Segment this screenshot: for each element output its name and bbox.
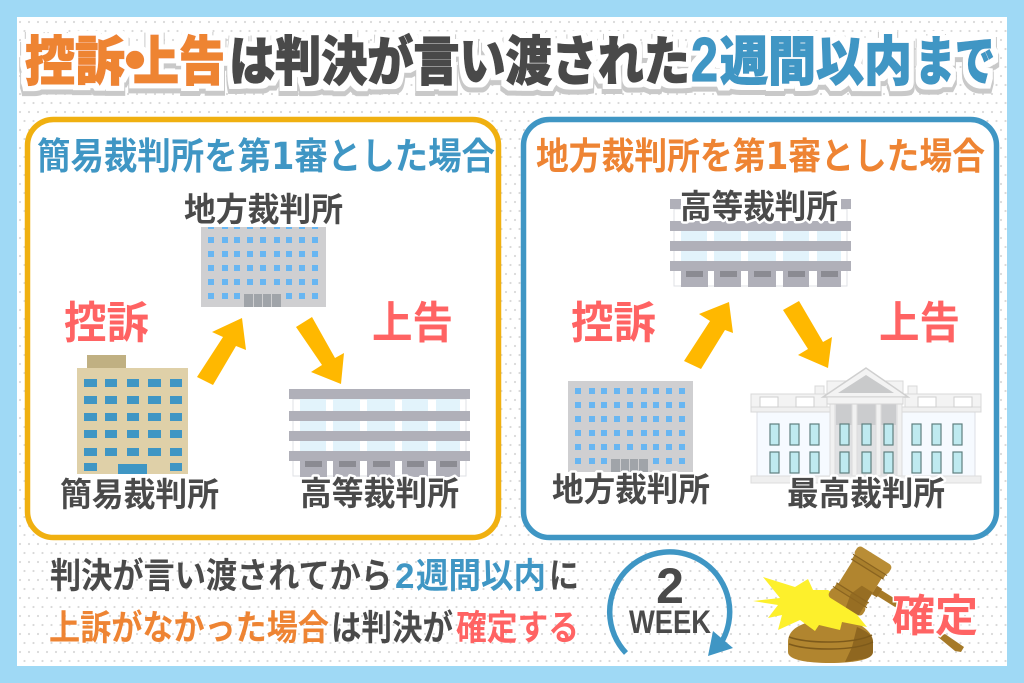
icon: gavel — [753, 545, 964, 663]
label: supreme court: 最高裁判所 — [787, 475, 945, 512]
text: bottom line one: 判決が言い渡されてから — [50, 557, 392, 596]
title: まで — [915, 33, 995, 92]
title: 控訴 — [25, 33, 125, 92]
icon: 2 week cycle: WEEK — [629, 604, 711, 640]
building: summary court — [77, 355, 188, 474]
building: high court — [670, 199, 851, 287]
panel: district court as first instance — [28, 120, 498, 538]
icon: 2 week cycle — [610, 552, 733, 656]
title: 週間以内 — [720, 33, 912, 92]
appeal label 上告: 上告 — [372, 299, 453, 348]
title: は判決が言い渡された — [229, 32, 690, 92]
title: 2 — [691, 26, 718, 95]
panel: high court as appellate — [524, 120, 996, 538]
appeal label 控訴: 控訴 — [571, 299, 656, 348]
text: bottom line two — [49, 609, 579, 648]
text: bottom line two: 上訴がなかった場合 — [49, 609, 329, 648]
text: bottom line one: 週間以内 — [416, 557, 546, 596]
text: bottom line one: に — [549, 557, 579, 596]
panel frame left — [28, 120, 498, 538]
panel heading left: 簡易裁判所を第1審とした場合 — [37, 135, 495, 178]
arrow: up to high court — [684, 302, 733, 369]
label: district court: 地方裁判所 — [552, 471, 710, 508]
building: supreme court — [751, 368, 981, 483]
arrow: down to supreme court — [783, 301, 832, 368]
panel frame right — [524, 120, 996, 538]
building: high court — [289, 389, 470, 477]
title: ・ — [105, 29, 165, 96]
text: bottom line two: 確定する — [456, 609, 579, 648]
label: high court: 高等裁判所 — [300, 475, 459, 512]
panel heading right: 地方裁判所を第1審とした場合 — [536, 135, 985, 178]
label: summary court: 簡易裁判所 — [60, 476, 219, 513]
building: district court — [568, 381, 693, 472]
title — [25, 26, 995, 96]
text: bottom line two: は判決が — [331, 609, 453, 648]
label: high court: 高等裁判所 — [680, 188, 838, 225]
arrow: down to high court — [296, 317, 344, 384]
text: finalized: 確定 — [892, 592, 978, 641]
appeal label 控訴: 控訴 — [64, 299, 149, 348]
label: district court: 地方裁判所 — [184, 191, 343, 228]
appeal label 上告: 上告 — [879, 299, 960, 348]
text: bottom line one: 2 — [395, 557, 414, 596]
building: district court — [201, 216, 326, 307]
arrow: up to district court — [197, 318, 246, 385]
icon: 2 week cycle: 2 — [656, 558, 684, 614]
title: 上告 — [133, 33, 225, 92]
